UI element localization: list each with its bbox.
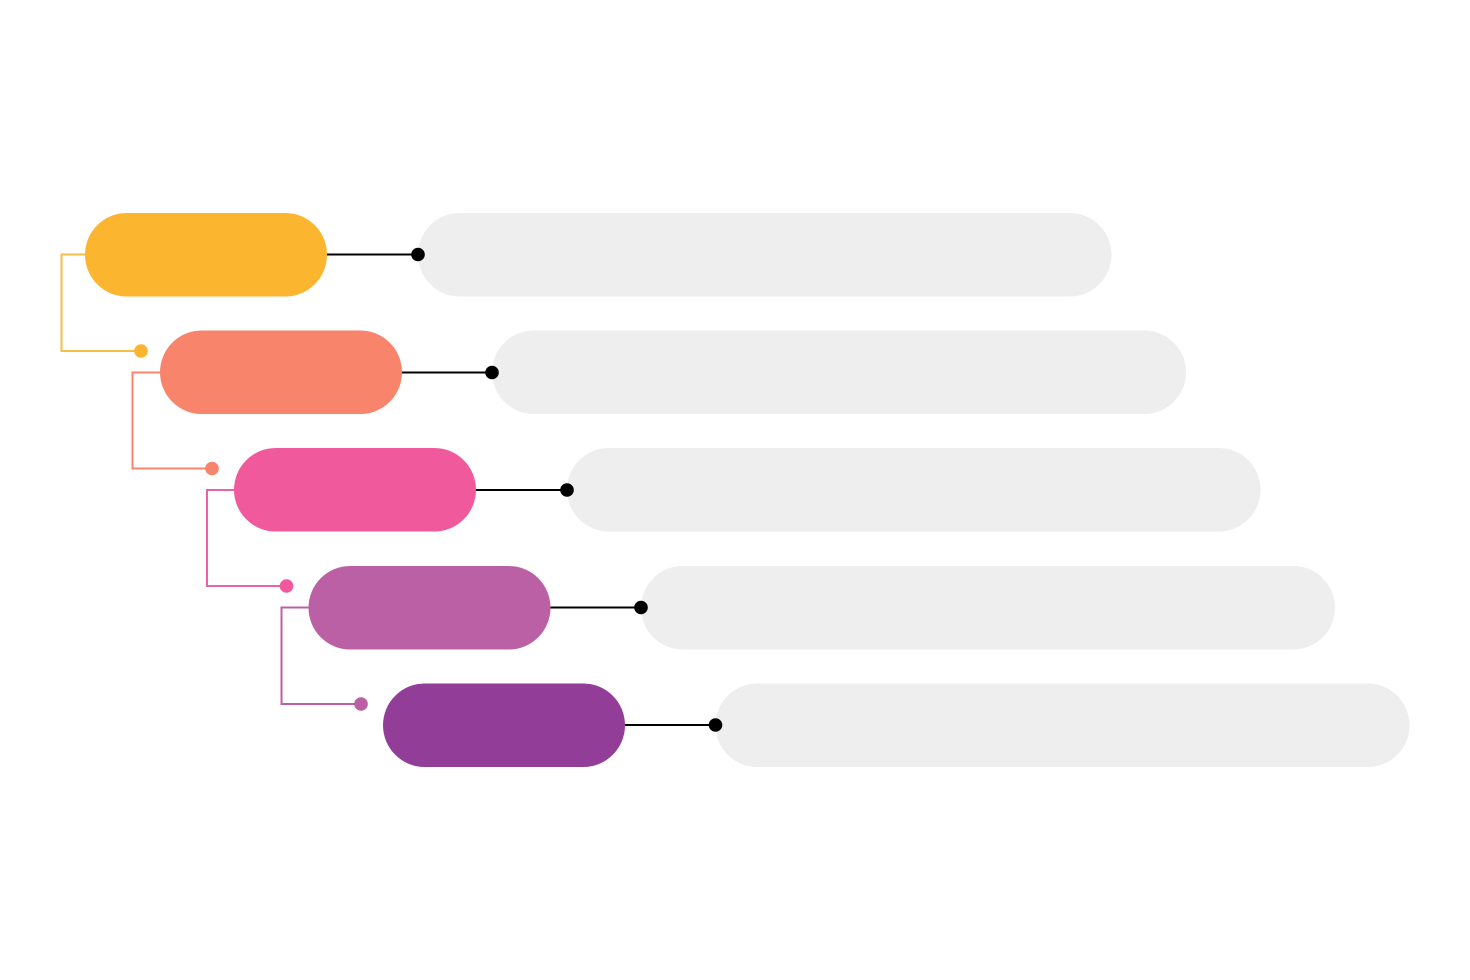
step 3 connector dot (560, 483, 574, 497)
step 1 pill (85, 213, 327, 296)
elbow arrow: step 4 to step 5 (282, 608, 368, 711)
step 4 row (308, 566, 1335, 650)
step 5 row (383, 684, 1410, 767)
step 1 connector line (327, 254, 418, 256)
step 3 row (234, 448, 1260, 532)
step 1 row (85, 213, 1112, 296)
step 5 pill (383, 684, 625, 767)
step 5 connector dot (709, 718, 722, 732)
step 2 connector dot (485, 366, 499, 379)
step 2 row (160, 330, 1186, 414)
step 1 content bar (418, 213, 1112, 296)
step 1 connector dot (411, 248, 425, 261)
step 2 connector line (402, 372, 492, 374)
elbow arrow: step 3 to step 4 (207, 490, 293, 593)
step 2 content bar (492, 330, 1186, 414)
elbow arrow: step 2 to step 3 (132, 372, 219, 475)
elbow arrow: step 1 to step 2 (62, 254, 148, 358)
step 3 pill (234, 448, 476, 532)
step 4 connector dot (634, 601, 648, 614)
step 5 content bar (716, 684, 1410, 767)
step 4 content bar (641, 566, 1335, 650)
step 5 connector line (625, 724, 715, 726)
step 2 pill (160, 330, 402, 414)
step 3 content bar (567, 448, 1260, 532)
step 4 connector line (550, 606, 641, 608)
step 4 pill (308, 566, 550, 650)
step 3 connector line (476, 489, 567, 491)
